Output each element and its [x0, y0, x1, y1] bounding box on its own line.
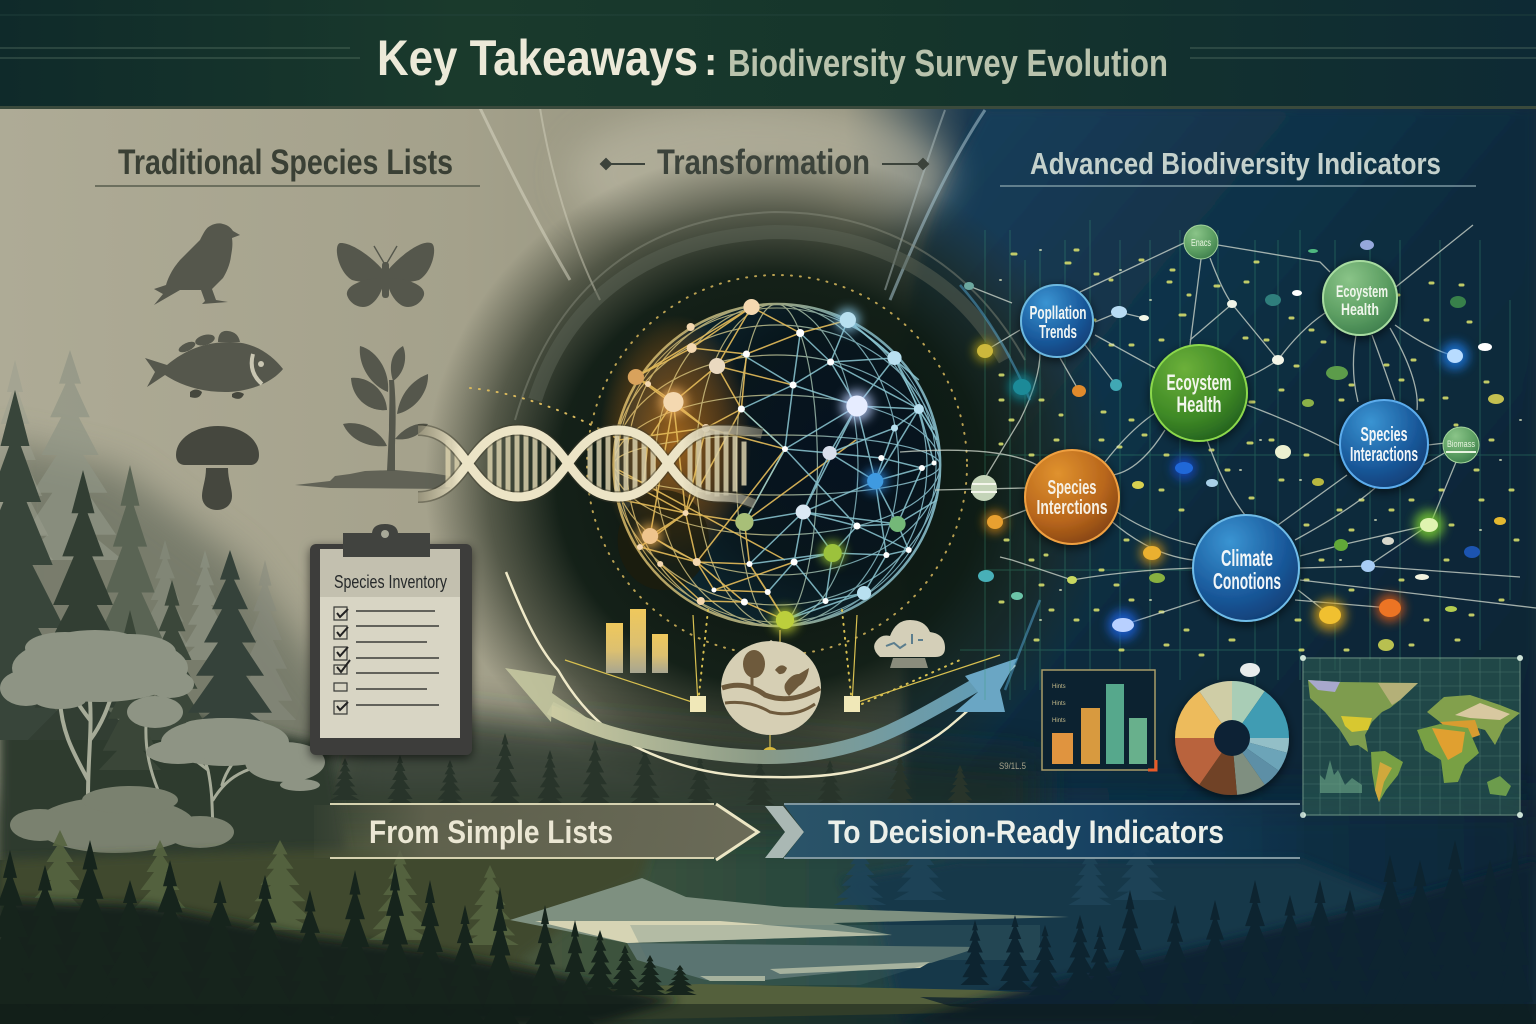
indicator bar chart: Hints — [1052, 684, 1066, 690]
bubble: population trends — [1021, 285, 1093, 357]
bubble: ecosystem health top: Health — [1341, 300, 1379, 319]
transformation sweep arrows — [505, 572, 1018, 777]
icon: bird — [154, 223, 240, 305]
indicator bar chart: Hints — [1052, 701, 1066, 707]
checklist rows — [334, 607, 439, 714]
title: Key Takeaways — [377, 30, 698, 86]
heading: transformation: Transformation — [657, 143, 870, 182]
bubble: small right: Biomass — [1447, 439, 1475, 449]
pie chart — [1175, 681, 1289, 795]
bubble: species interactions orange — [1025, 450, 1119, 544]
bubble: population trends: Popllation — [1030, 303, 1086, 323]
node squares and lower dot — [690, 696, 860, 757]
bubble: ecosystem health centre: Health — [1176, 392, 1222, 417]
network grid lines — [960, 220, 1536, 700]
network connector lines — [900, 225, 1536, 625]
glowing network nodes — [964, 240, 1506, 651]
bottom banner: from simple lists to decision-ready indicators — [314, 804, 1304, 860]
forest: misty and dark pines at left — [0, 350, 296, 770]
foreground dark pines — [0, 840, 1536, 1024]
title: Biodiversity Survey Evolution — [728, 43, 1168, 85]
node: small white link — [971, 475, 997, 501]
icon: gold bar chart — [606, 609, 668, 673]
left arrow head — [505, 668, 590, 722]
header band — [0, 0, 1536, 109]
icon: mushroom — [176, 426, 259, 510]
bubble: small top — [1184, 225, 1218, 259]
DNA helix — [418, 430, 762, 504]
indicator bar chart: Hints — [1052, 718, 1066, 724]
banner right: To Decision-Ready Indicators — [828, 814, 1224, 850]
scattered small data points — [1000, 250, 1521, 655]
mid treeline: olive and blue layers — [0, 830, 1536, 1024]
title — [377, 30, 1168, 86]
banner left — [314, 804, 760, 860]
bubble: species interactions orange: Species — [1048, 477, 1096, 499]
indicator bar chart — [1042, 670, 1156, 770]
map: south america — [1371, 751, 1403, 802]
clipboard heading: Species Inventory — [334, 572, 447, 592]
icon: butterfly — [337, 243, 434, 307]
bubble: population trends: Trends — [1039, 322, 1077, 342]
globe network — [599, 299, 940, 633]
globe grid — [614, 304, 940, 626]
map: eurasia — [1427, 695, 1520, 745]
deciduous trees — [0, 630, 325, 853]
icon: fish — [145, 331, 283, 399]
gold links — [619, 307, 856, 620]
mini chart — [1320, 760, 1362, 793]
bubble: ecosystem health top: Ecoystem — [1336, 282, 1388, 301]
icon: plant — [295, 346, 450, 489]
globe nodes — [628, 299, 937, 633]
bubble: small right — [1443, 427, 1479, 463]
bubble: climate conditions — [1193, 515, 1299, 621]
bubble: ecosystem health centre — [1151, 345, 1247, 441]
bubble: ecosystem health top — [1323, 261, 1397, 335]
tiny chart note: S9/1L.5 — [999, 761, 1026, 771]
map: africa — [1417, 724, 1479, 783]
bubble: species interactions blue: Species — [1360, 424, 1408, 446]
bubble: small top: Enacs — [1191, 238, 1211, 249]
icon: landscape globe — [721, 640, 821, 735]
ring arcs around transformation zone — [470, 108, 1025, 655]
map: australia — [1487, 776, 1511, 796]
world map panel — [1300, 655, 1523, 818]
bubble: species interactions blue — [1340, 400, 1428, 488]
clipboard: species inventory — [310, 524, 472, 755]
distant treeline beneath the sweep — [331, 733, 974, 805]
white node above pie — [1240, 663, 1260, 677]
bubble: species interactions orange: Interctions — [1036, 497, 1108, 519]
bubble: species interactions blue: Interactions — [1350, 444, 1418, 466]
banner left: From Simple Lists — [369, 814, 613, 850]
heading: traditional species lists: Traditional Species Lists — [118, 143, 453, 182]
teal links — [741, 320, 937, 620]
heading: advanced biodiversity indicators: Advanced Biodiversity Indicators — [1030, 146, 1441, 181]
banner right — [784, 804, 1304, 858]
chevron — [765, 806, 804, 858]
bubble: climate conditions: Conotions — [1213, 568, 1281, 594]
bubble: ecosystem health centre: Ecoystem — [1166, 370, 1232, 395]
lake — [490, 878, 1180, 1020]
title: : — [704, 40, 717, 84]
right arrow head — [955, 658, 1018, 712]
map: north america — [1308, 680, 1418, 752]
bubble: climate conditions: Climate — [1221, 545, 1273, 571]
link lines from globe to icons — [565, 610, 1000, 752]
icon: cloud — [874, 620, 945, 668]
